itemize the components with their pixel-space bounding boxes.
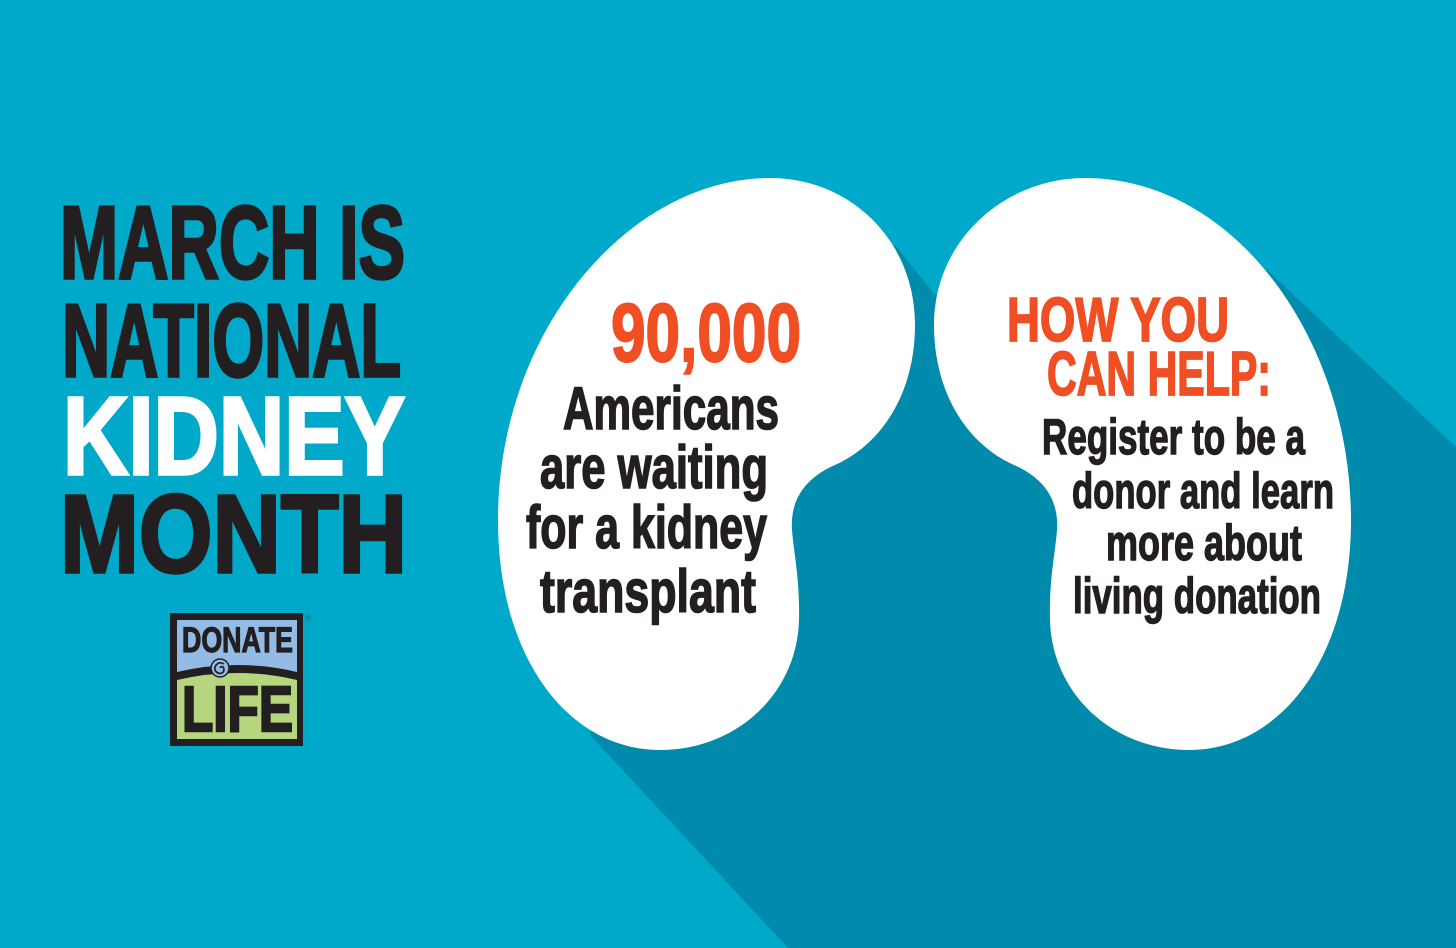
title line: National: NATIONAL (62, 283, 401, 398)
logo text: Donate: DONATE (182, 621, 293, 660)
registered mark: ® (305, 613, 312, 623)
caption line 2: are waiting (540, 434, 768, 501)
left kidney shape (498, 178, 915, 750)
logo swirl (211, 659, 229, 677)
logo land panel (177, 672, 297, 739)
heading line 2: CAN HELP: (1047, 340, 1271, 409)
title line: March is: MARCH IS (60, 185, 405, 300)
statistic caption (526, 375, 779, 625)
caption line 4: transplant (540, 558, 756, 625)
caption line 1: Americans (563, 375, 779, 442)
body line 3: more about (1106, 515, 1302, 571)
heading: How you can help (1007, 286, 1271, 409)
logo: Donate Life (170, 613, 312, 746)
logo text: Life: LIFE (182, 673, 293, 745)
long shadow of kidneys (590, 220, 1456, 948)
caption line 3: for a kidney (526, 494, 767, 561)
right kidney text (1007, 286, 1334, 624)
logo frame (170, 613, 303, 746)
call to action body (1042, 409, 1334, 624)
body line 2: donor and learn (1072, 463, 1334, 519)
logo sky panel (177, 620, 297, 672)
body line 4: living donation (1073, 568, 1321, 624)
right kidney shape (934, 178, 1351, 750)
body line 1: Register to be a (1042, 409, 1306, 465)
title line: Kidney: KIDNEY (63, 375, 405, 498)
left kidney text (526, 286, 801, 625)
title: March is National Kidney Month (60, 185, 407, 596)
statistic: 90,000: 90,000 (611, 286, 801, 379)
logo horizon band (177, 665, 297, 680)
heading line 1: HOW YOU (1007, 286, 1229, 355)
title line: Month: MONTH (60, 473, 407, 596)
